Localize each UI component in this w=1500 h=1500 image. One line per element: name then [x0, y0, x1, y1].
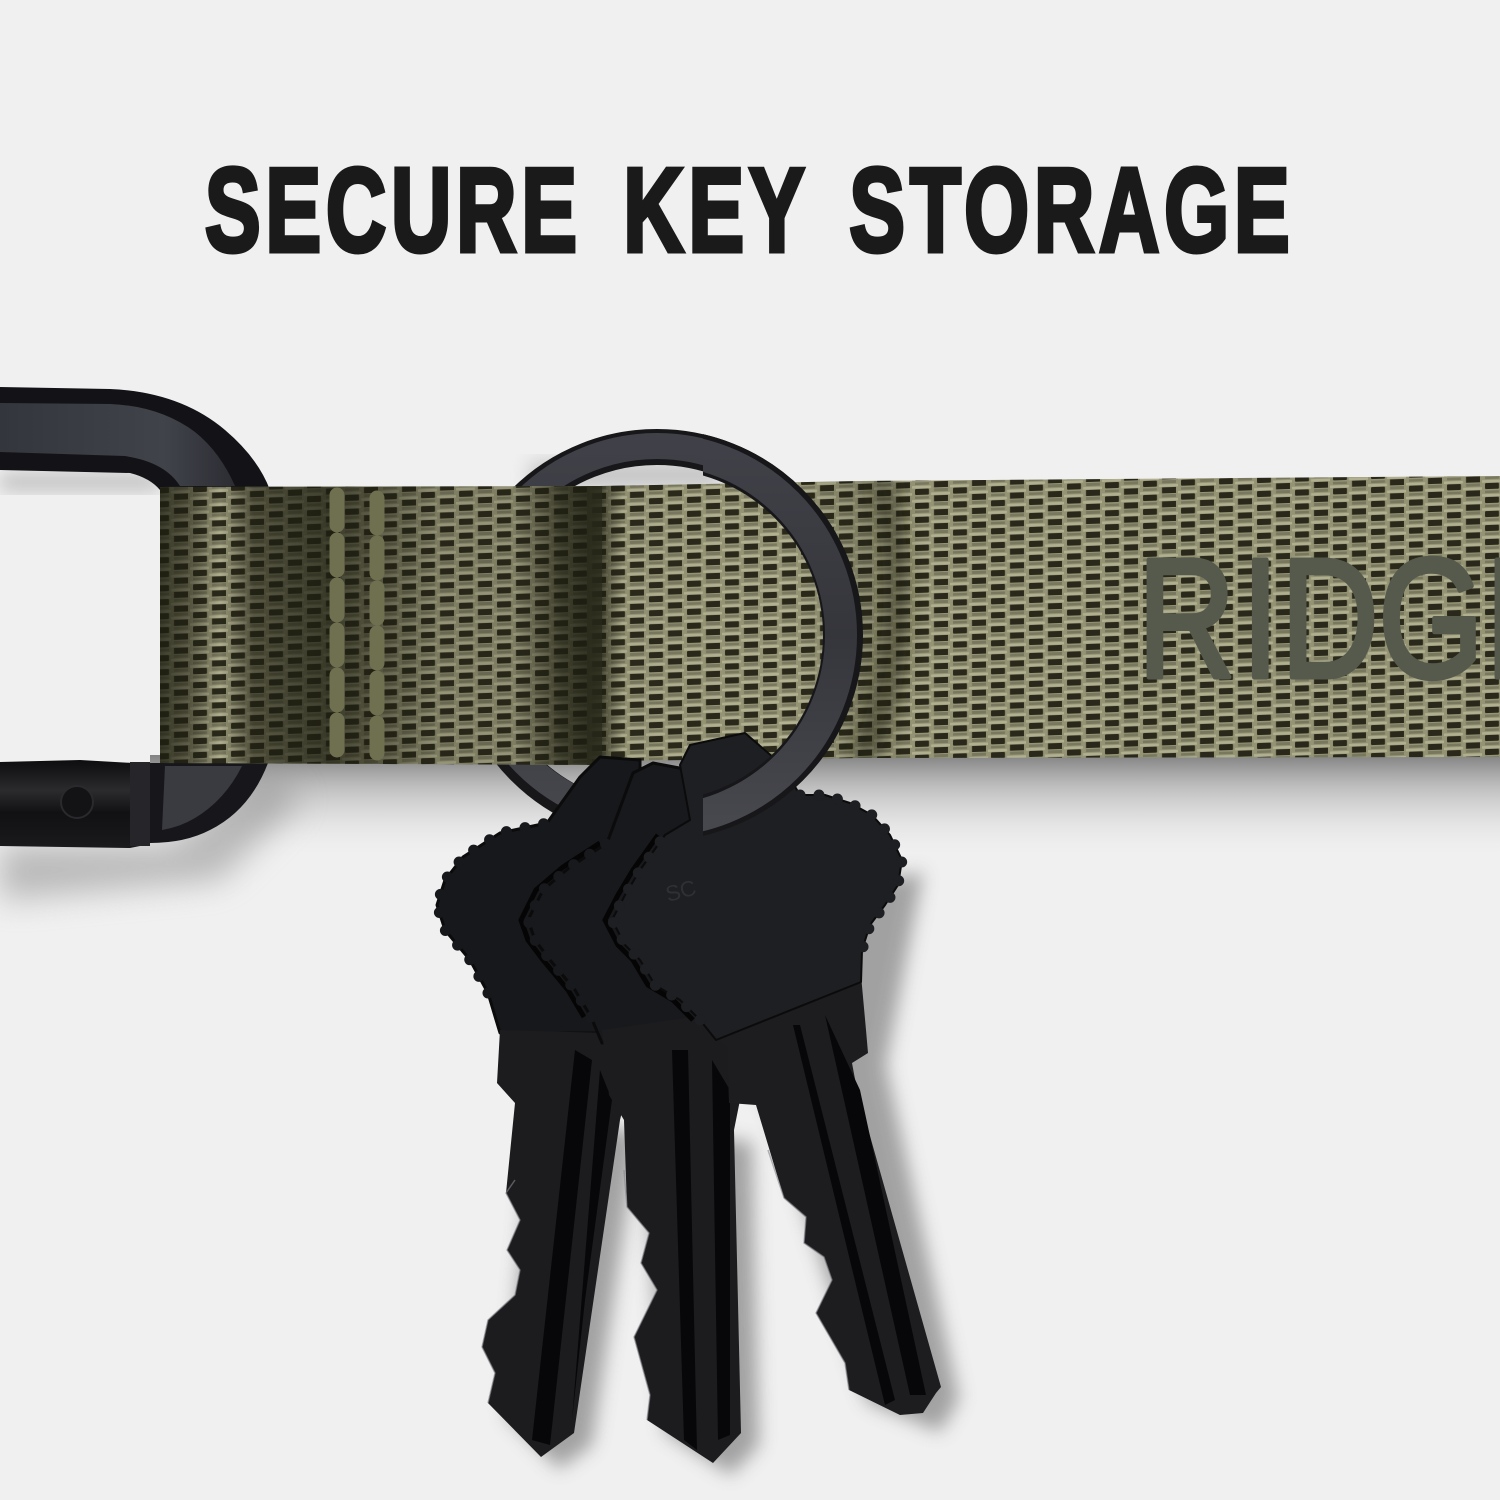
key middle scallops: [528, 843, 607, 1017]
key left grooves: [532, 1050, 612, 1445]
key left: [437, 757, 640, 1469]
ring front edge: [703, 434, 863, 835]
title: SECURE KEY STORAGE: [205, 143, 1295, 276]
key right edge shadow: [605, 835, 693, 1020]
key right grooves: [793, 1015, 926, 1405]
key left blade: [482, 1030, 625, 1457]
key right: [605, 733, 959, 1432]
key right tooth edge: [768, 1150, 849, 1390]
key left shadow: [506, 1115, 638, 1469]
carabiner top bar highlight: [0, 403, 235, 486]
key middle shadow: [642, 1132, 759, 1475]
key left head: [437, 757, 640, 1033]
key right shadow: [747, 872, 959, 1432]
split ring front: [703, 434, 863, 835]
key stamp: SC: [663, 875, 699, 907]
strap drop shadow: [0, 462, 1500, 900]
key right scallops: [612, 795, 902, 1020]
stitch line left: [330, 495, 344, 763]
carabiner pin: [61, 786, 93, 818]
key middle edge shadow: [521, 843, 600, 1017]
carabiner gate collar: [130, 762, 150, 846]
carabiner top bar: [0, 387, 270, 490]
key left scallops: [437, 823, 547, 993]
key left tooth edge: [482, 1180, 520, 1403]
carabiner gate barrel: [0, 760, 150, 848]
strap fold: [587, 470, 602, 770]
ring shadow on strap: [850, 480, 909, 757]
ring rear inner face: [471, 446, 843, 818]
carabiner: [0, 387, 270, 848]
key right head: [612, 733, 902, 1040]
strap weave: [160, 470, 1500, 770]
webbing strap: [160, 470, 1500, 770]
strap shading: [160, 470, 1500, 770]
carabiner lower face: [162, 766, 242, 830]
key middle tooth edge: [624, 1170, 657, 1420]
carabiner lower curve: [150, 763, 268, 843]
split ring behind strap: [469, 447, 845, 823]
key middle: [521, 763, 759, 1475]
key middle grooves: [672, 1050, 730, 1450]
stitch line right: [370, 498, 384, 763]
key right blade: [716, 975, 941, 1415]
key middle blade: [602, 1010, 741, 1463]
key middle head: [528, 763, 730, 1043]
ring front face: [703, 438, 857, 832]
